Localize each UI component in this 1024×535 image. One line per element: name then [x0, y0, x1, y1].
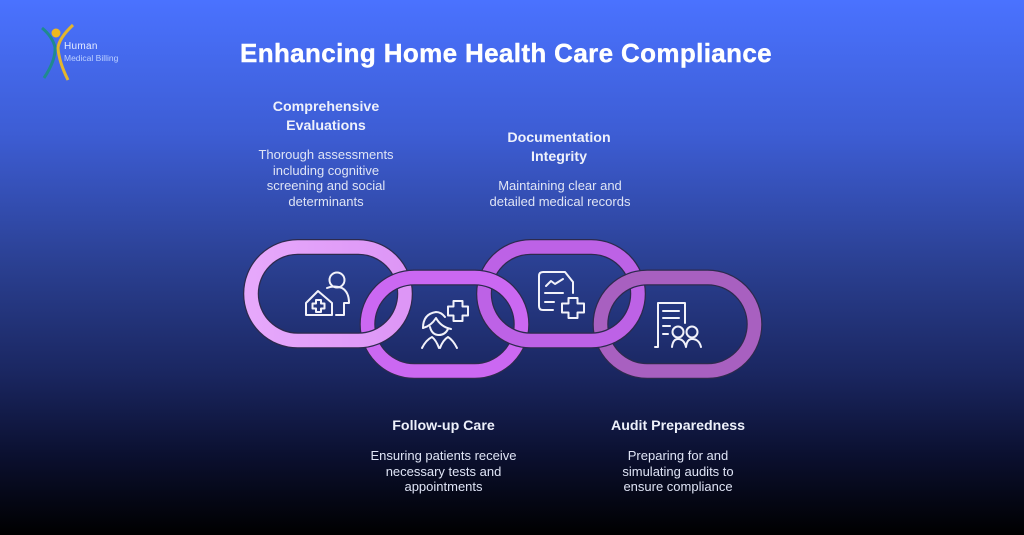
text block: documentation integrity: Documentation [507, 130, 611, 146]
text block: audit preparedness: ensure compliance [623, 479, 733, 494]
title: Enhancing Home Health Care Compliance [240, 38, 772, 68]
icon: document with chart and plus [539, 272, 584, 318]
text block: documentation integrity: detailed medical records [490, 194, 630, 208]
logo: Human [64, 41, 98, 52]
text block: comprehensive evaluations [258, 99, 394, 208]
link 2 [368, 278, 522, 371]
text block: follow-up care: necessary tests and [386, 464, 501, 478]
text block: audit preparedness: Preparing for and [628, 448, 728, 463]
text block: documentation integrity [490, 130, 630, 208]
icon: document with people [655, 303, 701, 347]
text block: comprehensive evaluations: Thorough assessments [258, 147, 394, 162]
text block: comprehensive evaluations: Comprehensive [273, 99, 379, 115]
link 1 [251, 247, 405, 340]
text block: comprehensive evaluations: Evaluations [286, 118, 366, 134]
text block: comprehensive evaluations: determinants [288, 194, 364, 208]
text block: comprehensive evaluations: including cognitive [273, 162, 379, 178]
chain graphic [243, 239, 762, 379]
link 4 [600, 278, 754, 371]
link 3 [484, 247, 638, 340]
text block: documentation integrity: Maintaining clear and [498, 178, 622, 193]
text block: follow-up care [370, 418, 516, 494]
link 1 lower overlap [246, 312, 410, 348]
text block: documentation integrity: Integrity [531, 148, 587, 164]
link 3 lower overlap [479, 312, 643, 348]
logo: Medical Billing [64, 53, 118, 63]
logo [41, 24, 118, 81]
text block: audit preparedness: Audit Preparedness [611, 418, 745, 434]
text block: comprehensive evaluations: screening and social [267, 178, 385, 193]
icon: home and person [306, 272, 349, 315]
text block: audit preparedness [611, 418, 745, 494]
text block: follow-up care: appointments [404, 479, 483, 494]
text block: follow-up care: Follow-up Care [392, 418, 495, 434]
text block: follow-up care: Ensuring patients receive [370, 448, 516, 463]
icon: nurse with plus [422, 301, 468, 348]
text block: audit preparedness: simulating audits to [622, 464, 734, 478]
